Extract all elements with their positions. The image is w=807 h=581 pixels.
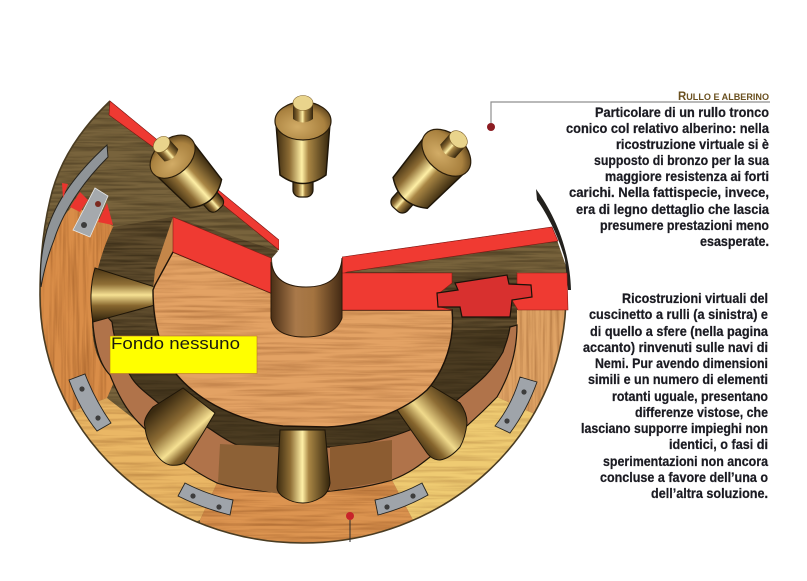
text block: roller detail: presumere prestazioni meno [600,217,769,233]
red top strip, left [109,101,279,250]
red joint pieces, upper left [62,183,113,225]
text block: virtual reconstructions: differenze vistose, che [635,404,768,420]
bearing cutaway illustration [39,100,571,544]
callout leader: top [487,102,770,131]
text block: virtual reconstructions: di quello a sfere (nella pagina [590,323,768,339]
text block: roller detail: era di legno dettaglio che lascia [576,201,769,217]
yellow label box [110,334,257,374]
pit wall [92,300,517,494]
inner pit [92,217,517,446]
inner wooden disc [150,250,460,430]
bottom-left roller [144,388,215,465]
text block: roller detail [566,104,769,249]
text block: roller detail: Particolare di un rullo tronco [595,104,769,120]
base plate: dark oak underside [43,102,566,522]
detached roller: centre [275,96,331,197]
text block: roller detail: maggiore resistenza ai forti [605,168,769,184]
central hub opening [272,225,342,287]
text block: roller detail: esasperate. [700,233,769,249]
text block: virtual reconstructions: rotanti uguale, presentano [612,388,768,404]
central hub cylinder [271,258,342,337]
text block: virtual reconstructions: identici, o fasi di [669,436,768,452]
ring outer edge line [40,101,566,543]
red block, left of hub [173,217,271,293]
dovetail key [437,275,532,317]
metal strip, upper right [536,189,571,290]
text block: virtual reconstructions: Ricostruzioni virtuali del [622,290,768,306]
text block: virtual reconstructions: dell’altra soluzione. [651,485,768,501]
heading: Rullo e alberino: RULLO E ALBERINO [678,89,769,103]
outer wooden ring [20,200,600,570]
text block: virtual reconstructions: lasciano supporre impieghi non [581,420,768,436]
red block, right edge [512,273,568,310]
callout leader: bottom [346,512,354,542]
metal plate: bottom left [178,483,233,515]
text block: virtual reconstructions: accanto) rinvenuti sulle navi di [583,339,768,355]
metal plate: upper left [73,188,108,237]
detached roller: right [375,115,484,228]
metal plate: bottom right [375,483,428,515]
text block: virtual reconstructions: sperimentazioni non ancora [603,453,768,469]
text block: virtual reconstructions: simili e un numero di elementi [588,371,768,387]
bottom roller [277,430,330,503]
metal strip, upper left [40,145,108,287]
text block: roller detail: ricostruzione virtuale si è [616,136,769,152]
text block: roller detail: conico col relativo alberino: nella [566,120,769,136]
text block: virtual reconstructions [581,290,768,501]
text block: virtual reconstructions: concluse a favore dell’una o [600,469,768,485]
text block: virtual reconstructions: Nemi. Pur avendo dimensioni [595,355,768,371]
yellow label box: Fondo nessuno [111,334,240,353]
inner disc side face [153,217,173,290]
metal plate: lower left [69,374,111,431]
bottom-right roller [395,385,467,460]
text block: roller detail: carichi. Nella fattispecie, invece, [569,184,769,200]
detached roller: left [138,122,239,226]
red block, right of hub [342,273,452,310]
metal plate: right [495,377,537,433]
left roller [91,268,155,322]
red top strip, right [342,227,558,274]
text block: roller detail: supposto di bronzo per la sua [594,152,769,168]
text block: virtual reconstructions: cuscinetto a rulli (a sinistra) e [589,306,768,322]
